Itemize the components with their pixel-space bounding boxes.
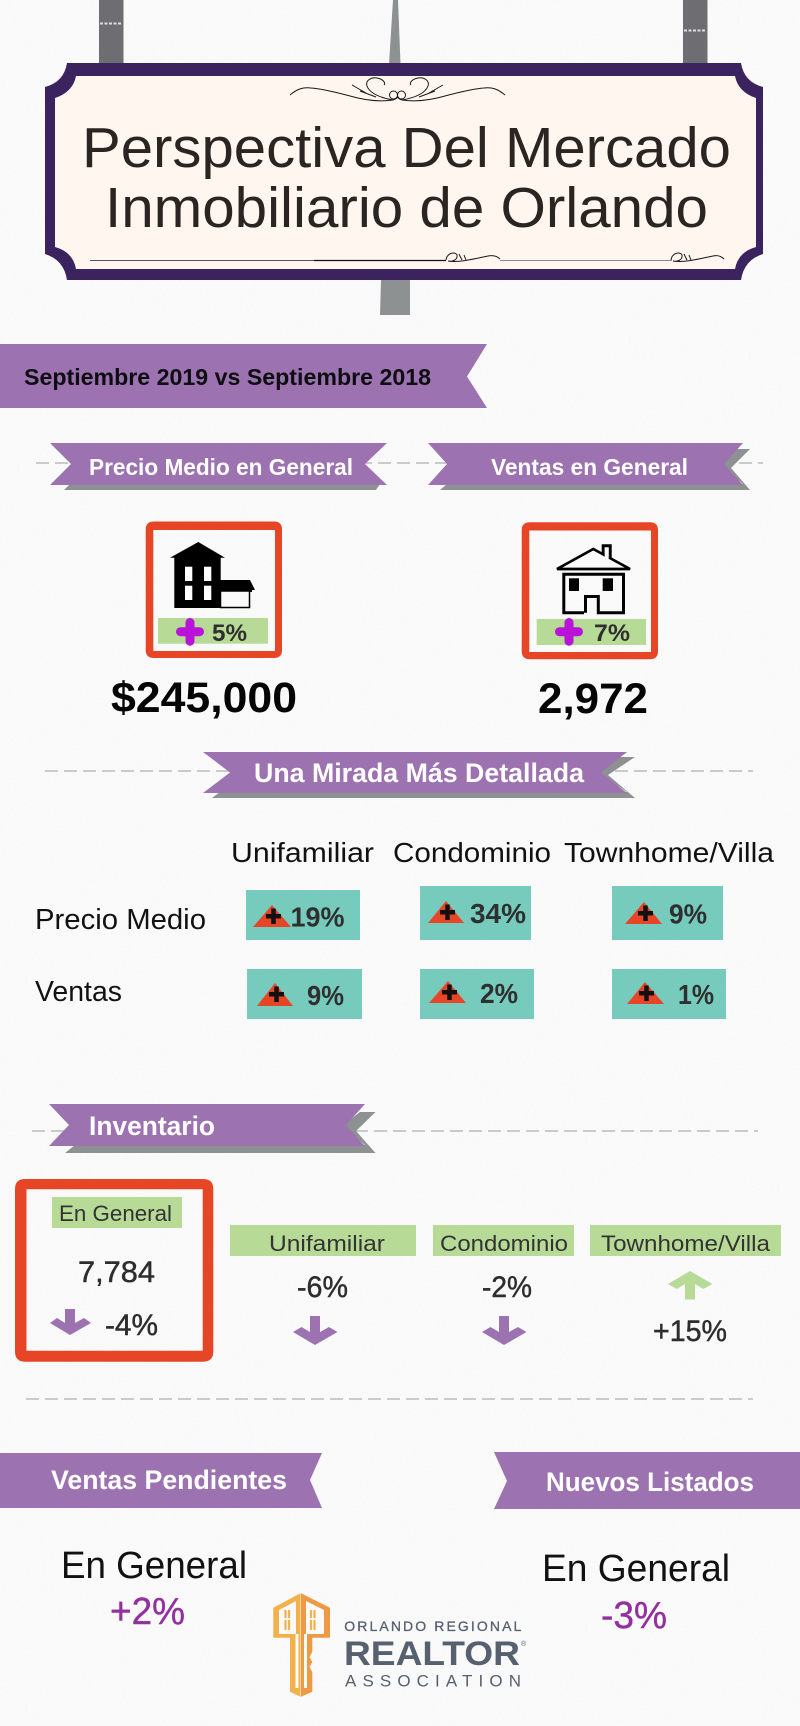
detail table [35,837,774,1019]
label: En General [59,1201,172,1226]
median price value: $245,000 [111,674,297,722]
card: median price [146,522,282,658]
column: single family inventory: Unifamiliar [269,1231,385,1256]
title text: Inmobiliario de Orlando [105,176,708,240]
column: townhome inventory: Townhome/Villa [601,1231,771,1256]
dashed divider: bottom section [26,1398,753,1400]
stat: pending sales: +2% [110,1591,185,1633]
wordmark: ORLANDO REGIONAL [344,1618,522,1634]
dashed divider: inventory section [32,1130,758,1132]
value: 7,784 [78,1256,155,1289]
banner: Ventas Pendientes: Ventas Pendientes [51,1465,287,1495]
cell: sales single family: 9% [307,980,344,1011]
row labels: Precio Medio [35,904,206,936]
dashed divider: overall section [36,462,763,464]
stat: pending sales: En General [61,1545,247,1587]
cell: sales townhome: 1% [678,979,714,1010]
column: condo inventory: Condominio [440,1231,568,1256]
stat: new listings: En General [542,1548,730,1590]
column: single family inventory: -6% [297,1271,348,1304]
stat: pending sales [61,1545,247,1633]
ribbon: Ventas en General [428,443,750,490]
change badge: 7% [594,620,630,647]
cell: price townhome: 9% [669,898,707,930]
ribbon: Una Mirada Mas Detallada: Una Mirada Más Detallada [254,758,585,788]
icon: arrow down [50,1309,91,1335]
change: -4% [105,1309,158,1342]
card: total sales [522,522,658,659]
card: inventory overall [15,1179,213,1362]
title text [82,116,731,240]
dashed divider: detail section [45,770,753,772]
cell: sales townhome [612,969,726,1019]
cell: price single family: 19% [290,902,345,933]
stat: new listings [542,1548,730,1637]
column: townhome inventory [590,1225,781,1348]
red frame [15,1179,213,1362]
cell: price single family [246,890,360,940]
column headers: Condominio [393,837,551,868]
sign posts [99,0,708,315]
sign frame [45,63,763,280]
banner: Ventas Pendientes [0,1453,322,1508]
total sales value: 2,972 [538,675,648,723]
cell: price condo [420,886,531,940]
ribbon: Ventas en General: Ventas en General [491,454,688,480]
column: single family inventory [230,1225,416,1345]
change badge: 5% [212,620,247,647]
wordmark: ® [521,1640,527,1648]
wordmark: REALTOR [344,1635,520,1673]
icon: townhouse with garage [170,542,255,608]
wordmark: ASSOCIATION [345,1672,521,1691]
logo: Orlando Regional Realtor Association [273,1593,527,1697]
ribbon: Precio Medio en General: Precio Medio en General [89,454,353,480]
icon: key [273,1593,330,1697]
column: condo inventory: -2% [482,1271,532,1304]
date banner: Septiembre 2019 vs Septiembre 2018 [24,364,431,390]
ribbon: Precio Medio en General [50,443,387,490]
sign cream panel [55,76,756,269]
banner: Nuevos Listados [494,1452,800,1509]
stat: new listings: -3% [601,1595,667,1637]
red frame [522,522,658,659]
wordmark [344,1618,527,1691]
row labels [35,904,206,1008]
row labels: Ventas [35,976,122,1008]
cell: sales single family [247,969,362,1019]
date banner [0,344,487,408]
label [52,1197,182,1228]
ribbon: Una Mirada Mas Detallada [203,752,635,798]
ribbon: Inventario: Inventario [89,1111,215,1141]
cell: price condo: 34% [470,898,526,929]
cell: sales condo: 2% [480,978,518,1009]
column headers: Townhome/Villa [564,837,774,868]
cell: sales condo [420,969,534,1019]
bottom rule with flourishes [90,253,724,261]
column headers [231,837,774,868]
title sign [45,63,763,280]
column: condo inventory [433,1225,574,1345]
cell: price townhome [612,886,723,940]
title text: Perspectiva Del Mercado [82,116,731,180]
ribbon: Inventario [49,1104,376,1153]
icon: outlined house [557,546,630,613]
red frame [146,522,282,658]
top flourish [290,78,505,101]
column headers: Unifamiliar [231,837,374,868]
banner: Nuevos Listados: Nuevos Listados [546,1467,754,1497]
column: townhome inventory: +15% [653,1315,727,1348]
